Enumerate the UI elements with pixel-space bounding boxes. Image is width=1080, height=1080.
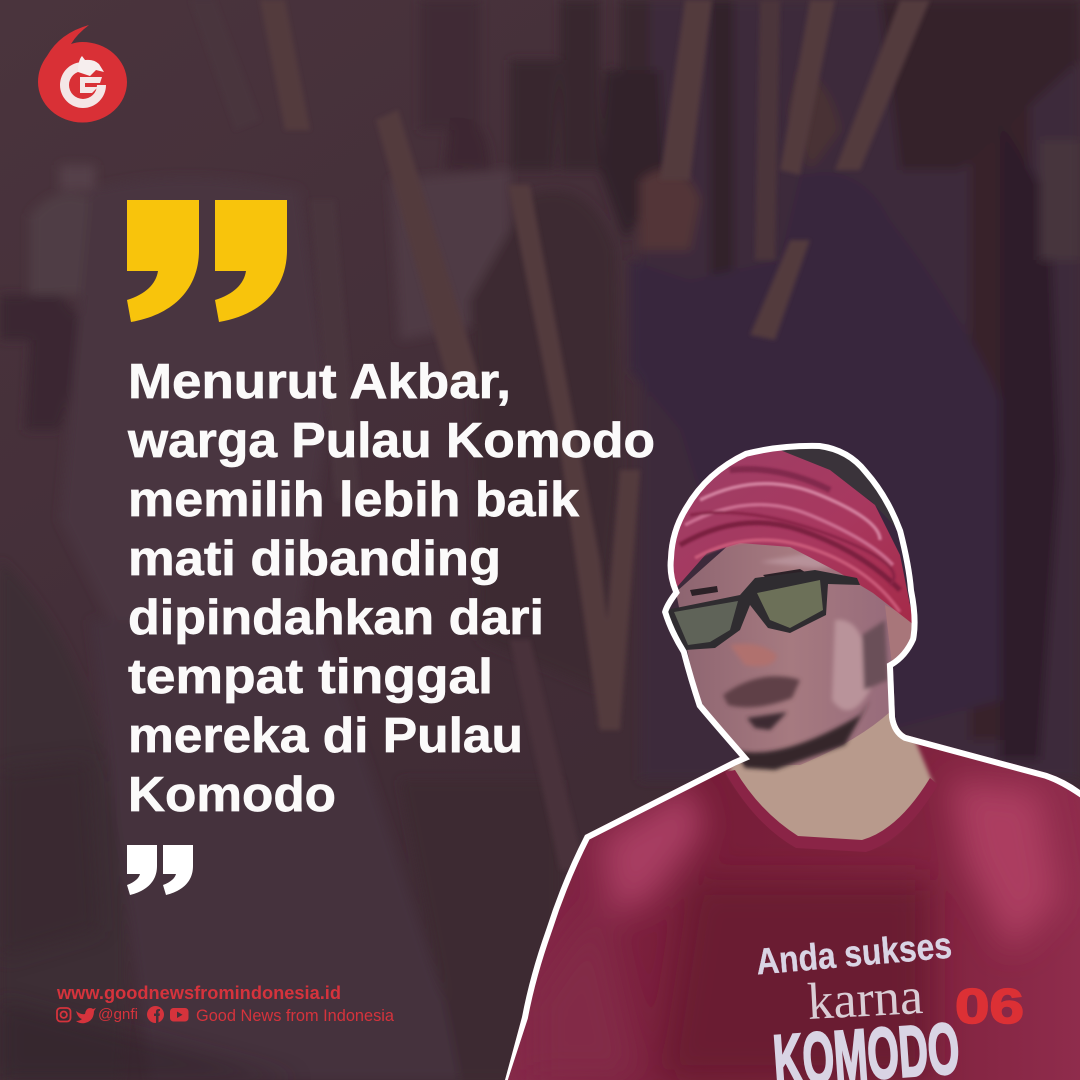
icon: facebook [147, 1006, 164, 1023]
icon: twitter [76, 1008, 96, 1023]
t-shirt [500, 730, 1080, 1080]
shirt printed text: karna [806, 968, 924, 1031]
icon: youtube [170, 1008, 188, 1022]
shirt printed text: Anda sukses [754, 925, 954, 983]
ear [885, 605, 912, 660]
main quote text: Komodo [128, 768, 336, 822]
white sticker outline [495, 443, 1080, 1080]
large opening quotation mark [127, 200, 287, 322]
hair [782, 449, 895, 526]
neck [725, 690, 938, 852]
main quote text: mati dibanding [128, 532, 501, 586]
handle: @gnfi [98, 1007, 138, 1023]
icon: instagram [57, 1008, 70, 1022]
page number: 06 [955, 980, 1024, 1034]
website url: www.goodnewsfromindonesia.id [56, 983, 341, 1003]
portrait: man with bandana, sunglasses and red shirt [495, 443, 1080, 1080]
main quote text: Menurut Akbar, [128, 355, 511, 409]
bandana [668, 448, 914, 625]
wooden poles [190, 0, 930, 870]
face [676, 535, 905, 770]
page name: Good News from Indonesia [196, 1007, 395, 1025]
sunglasses [666, 570, 860, 650]
main quote text: warga Pulau Komodo [127, 414, 655, 468]
shirt printed text [754, 925, 962, 1080]
main quote text: mereka di Pulau [128, 709, 523, 763]
main quote text: memilih lebih baik [128, 473, 580, 527]
main quote text: dipindahkan dari [128, 591, 544, 645]
main quote text [127, 355, 655, 822]
footer: website and social handles [56, 983, 395, 1025]
logo: red GNFI swirl with eagle ring [38, 25, 127, 122]
small closing quotation mark [127, 845, 193, 895]
main quote text: tempat tinggal [128, 650, 493, 704]
